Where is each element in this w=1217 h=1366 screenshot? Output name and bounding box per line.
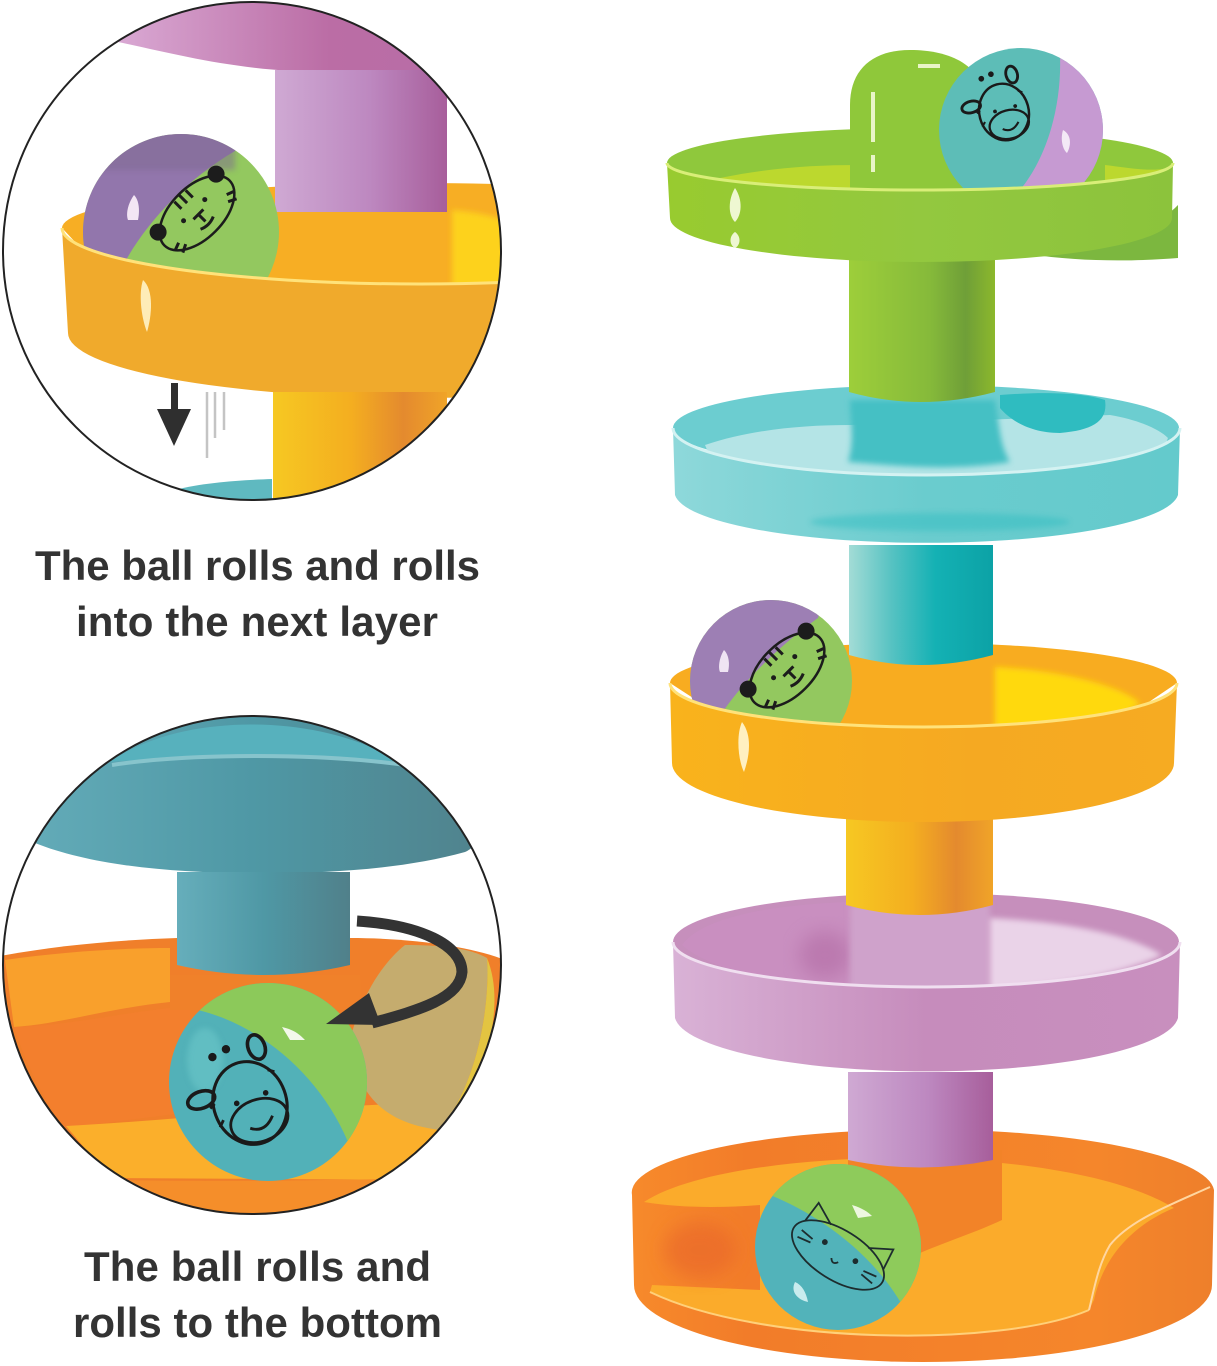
- orange deep floor: [14, 1006, 190, 1128]
- purple tray: [673, 893, 1180, 1071]
- orange base tray: [632, 1129, 1214, 1362]
- teal column: [849, 545, 993, 665]
- inset circle: ball rolls to next layer: [2, 1, 502, 501]
- toy tower: [632, 45, 1214, 1362]
- yellow tray front: [670, 683, 1177, 822]
- caption: bottom: rolls to the bottom: [73, 1299, 442, 1346]
- teal tray: [673, 385, 1180, 543]
- teal tray: [36, 717, 471, 872]
- giraffe face: [186, 1033, 290, 1146]
- yellow tray front rim: [62, 234, 498, 398]
- purple column: [848, 1072, 993, 1168]
- ball: tiger on yellow tray: [690, 600, 852, 723]
- ghost ball: [350, 945, 494, 1130]
- caption: next layer: [35, 542, 480, 645]
- knob highlight: [873, 66, 940, 172]
- purple tray underside: [118, 3, 422, 70]
- yellow tray floor: [995, 667, 1140, 735]
- teal tray peek: [180, 479, 272, 499]
- yellow tray back: [670, 643, 1177, 735]
- yellow floor front: [66, 1102, 458, 1180]
- green tray floor: [720, 165, 1168, 192]
- yellow tray bright floor: [450, 208, 500, 282]
- motion lines: [207, 392, 224, 458]
- orange light band back: [5, 948, 170, 1027]
- green column: [849, 258, 995, 402]
- ball: giraffe on green tray: [939, 48, 1103, 188]
- caption: next layer: into the next layer: [76, 598, 438, 645]
- yellow column: [273, 392, 447, 502]
- green spiral drop: [1010, 205, 1178, 260]
- tiger face: [150, 166, 237, 254]
- ball with giraffe: [165, 980, 375, 1185]
- arrow: curved: [326, 921, 462, 1025]
- green tray front: [667, 163, 1173, 262]
- yellow tray back wall: [62, 183, 498, 282]
- purple column: [275, 70, 447, 212]
- caption: next layer: The ball rolls and rolls: [35, 542, 480, 589]
- ball: cat: [755, 1164, 921, 1330]
- green knob: [850, 50, 985, 190]
- caption: bottom: [73, 1243, 442, 1346]
- orange base: [4, 938, 500, 1181]
- tiger face: [734, 617, 840, 723]
- ball: purple and green with tiger: [83, 134, 279, 278]
- giraffe face: [954, 64, 1035, 150]
- orange hub: [170, 975, 362, 1010]
- cat face: [781, 1199, 900, 1304]
- teal column: [177, 872, 350, 975]
- green tray back: [667, 128, 1173, 198]
- orange lip front: [130, 1179, 377, 1213]
- inset circle: ball rolls to bottom: [0, 700, 510, 1225]
- arrow: down: [157, 383, 191, 446]
- caption: bottom: The ball rolls and: [84, 1243, 431, 1290]
- yellow column: [846, 818, 993, 915]
